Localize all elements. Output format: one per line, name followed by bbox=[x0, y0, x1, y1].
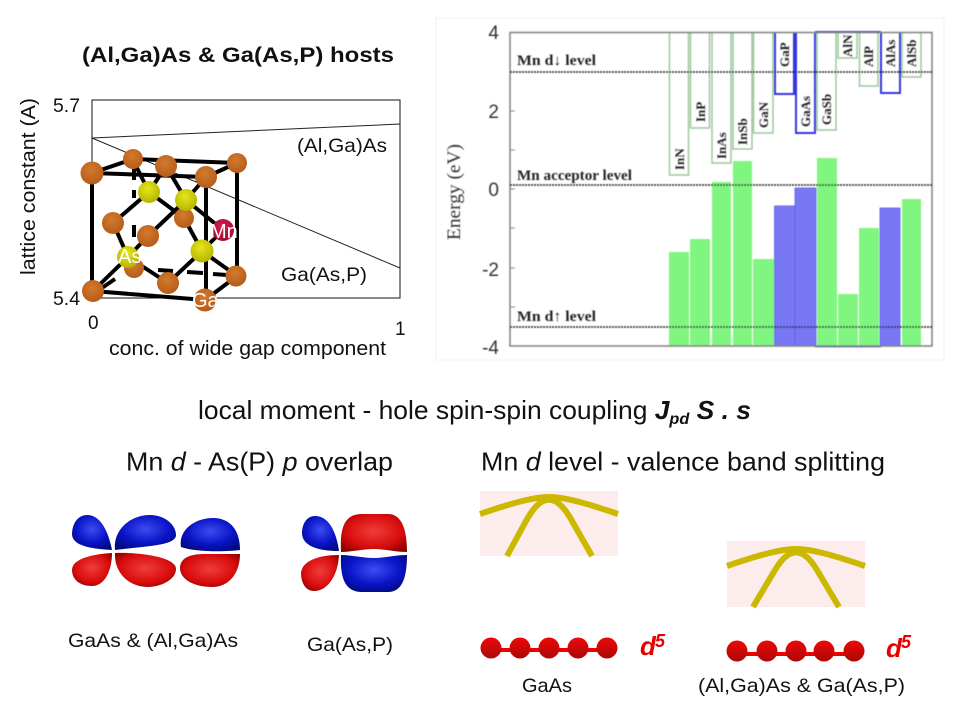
compound labels: GaSb bbox=[819, 94, 834, 125]
d5 label left: 5 bbox=[655, 631, 666, 651]
d levels: alloys bbox=[726, 640, 864, 662]
y tick 5.7: 5.7 bbox=[53, 96, 80, 117]
compound labels: InN bbox=[672, 148, 687, 170]
level lines bbox=[510, 72, 932, 327]
y axis numbers: 2 bbox=[488, 102, 499, 123]
atom label Mn: Mn bbox=[210, 221, 238, 243]
label Ga(As,P): Ga(As,P) bbox=[281, 264, 367, 286]
heading: coupling: S . s bbox=[689, 395, 751, 425]
compound labels: AlP bbox=[861, 46, 876, 67]
atom label Ga: Ga bbox=[192, 290, 220, 312]
heading: splitting: Mn d level - valence band splitting bbox=[481, 446, 885, 476]
label: GaAs and (Al,Ga)As: GaAs & (Al,Ga)As bbox=[68, 630, 238, 652]
heading: coupling: pd bbox=[668, 411, 691, 428]
label: alloys: (Al,Ga)As & Ga(As,P) bbox=[698, 675, 905, 697]
line: Ga(As,P) bbox=[92, 138, 400, 268]
y ticks bbox=[510, 111, 515, 307]
band diagram: GaAs bbox=[480, 491, 618, 556]
compound labels: AlAs bbox=[883, 40, 898, 67]
atom label As: As bbox=[118, 246, 141, 268]
compound labels bbox=[672, 34, 919, 170]
compound labels: GaN bbox=[756, 101, 771, 128]
d5 label right: 5 bbox=[901, 632, 912, 652]
compound labels: GaP bbox=[777, 42, 792, 67]
d5 label right: d bbox=[886, 633, 903, 663]
compound labels: GaAs bbox=[798, 96, 813, 127]
label (Al,Ga)As: (Al,Ga)As bbox=[297, 135, 387, 157]
y axis title: Energy (eV) bbox=[444, 144, 465, 240]
chart frame bbox=[92, 100, 400, 298]
orbital: GaAs and (Al,Ga)As bbox=[72, 515, 240, 587]
heading: coupling: local moment - hole spin-spin coupling J bbox=[198, 395, 669, 425]
orbital: Ga(As,P) bbox=[301, 514, 407, 592]
panel: lattice constant chart with crystal bbox=[18, 43, 406, 360]
y axis numbers bbox=[482, 23, 499, 359]
compound labels: InSb bbox=[735, 118, 750, 145]
compound labels: InAs bbox=[714, 132, 729, 159]
y axis numbers: 4 bbox=[488, 23, 499, 44]
y tick 5.4: 5.4 bbox=[53, 289, 80, 310]
valence bars bbox=[669, 158, 921, 346]
x tick 0: 0 bbox=[88, 313, 99, 334]
label: Ga(As,P): Ga(As,P) bbox=[307, 634, 393, 656]
chart frame bbox=[510, 32, 932, 346]
line: (Al,Ga)As bbox=[92, 124, 400, 138]
x axis label: conc. of wide gap component bbox=[109, 338, 386, 360]
level label: Mn acceptor: Mn acceptor level bbox=[517, 168, 632, 184]
label: GaAs: GaAs bbox=[522, 675, 572, 697]
compound labels: AlN bbox=[840, 34, 855, 57]
y axis numbers: -2 bbox=[482, 260, 499, 281]
panel: Mn levels vs band edges chart bbox=[436, 18, 944, 360]
d5 label left bbox=[640, 631, 666, 661]
d5 label right bbox=[886, 632, 912, 663]
compound labels: InP bbox=[693, 102, 708, 122]
y axis label: lattice constant (A) bbox=[18, 98, 40, 275]
compound labels: AlSb bbox=[904, 40, 919, 67]
d levels: GaAs bbox=[480, 638, 618, 658]
chart title: (Al,Ga)As & Ga(As,P) hosts bbox=[82, 43, 394, 67]
level label: Mn d down: Mn d↓ level bbox=[517, 53, 596, 69]
y axis numbers: -4 bbox=[482, 338, 499, 359]
level label: Mn d up: Mn d↑ level bbox=[517, 309, 596, 325]
crystal structure bbox=[80, 149, 247, 312]
band diagram: (Al,Ga)As and Ga(As,P) bbox=[727, 541, 865, 607]
heading: overlap: Mn d - As(P) p overlap bbox=[126, 446, 393, 476]
x tick 1: 1 bbox=[395, 319, 406, 340]
y axis numbers: 0 bbox=[488, 180, 499, 201]
d5 label left: d bbox=[640, 631, 657, 661]
conduction band boxes bbox=[670, 32, 921, 175]
